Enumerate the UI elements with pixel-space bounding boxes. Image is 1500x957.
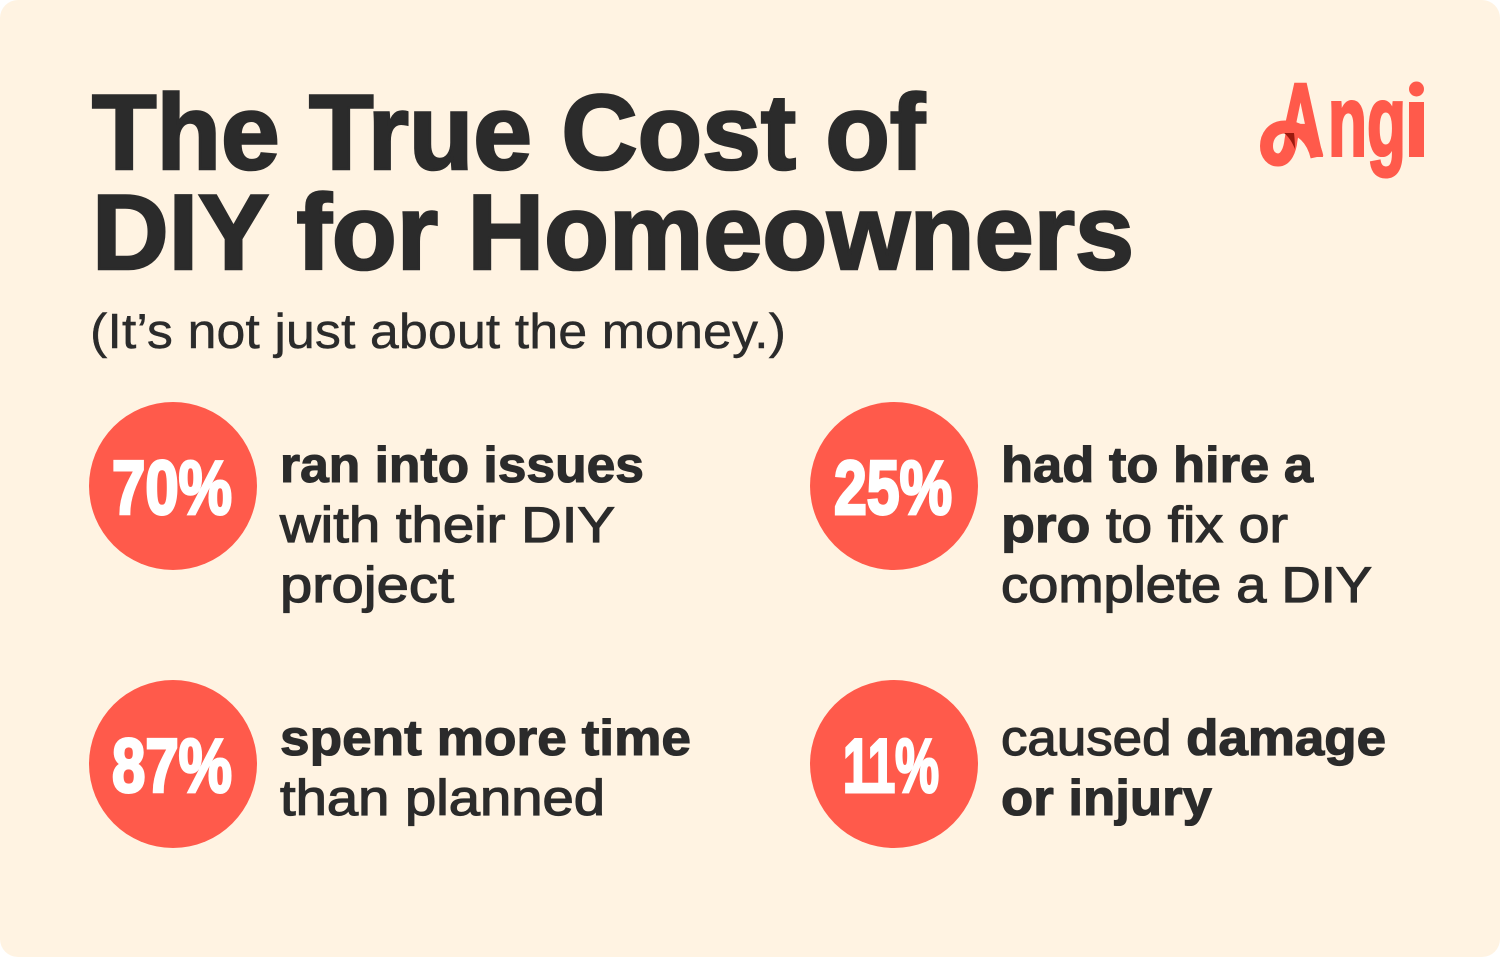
stat circle 11% — [810, 680, 978, 848]
stat circle 70% — [89, 402, 257, 570]
stat description 87%: than planned — [280, 770, 605, 826]
stat: 11% caused damage — [810, 680, 1386, 848]
stat description 25%: had to hire a — [1001, 437, 1314, 493]
stat description 87% — [280, 710, 691, 826]
stat: 25% had to hire a pro — [810, 402, 1372, 613]
stat value 11%: 11% — [843, 724, 939, 809]
stat description 11%: or injury — [1001, 770, 1212, 826]
stat description 25%: complete a DIY — [1001, 557, 1372, 613]
stat description 70%: project — [280, 557, 454, 613]
stat value 87%: 87% — [112, 724, 232, 809]
stat description 70%: with their DIY — [279, 497, 615, 553]
stat description 25% — [1001, 437, 1372, 613]
stat description 87%: spent more time — [280, 710, 691, 766]
stat: 70% ran into issues — [89, 402, 644, 613]
title: The True Cost of — [92, 72, 925, 192]
stat description 25%: pro to fix or — [1001, 497, 1288, 553]
stat value 70%: 70% — [112, 446, 232, 531]
title — [92, 72, 1134, 292]
stat description 11% — [1001, 710, 1386, 826]
subtitle: (It’s not just about the money.) — [90, 305, 786, 359]
stat value 25%: 25% — [834, 446, 952, 531]
logo: Angi — [1260, 82, 1424, 178]
stat description 11%: caused damage — [1001, 710, 1386, 766]
title: DIY for Homeowners — [92, 172, 1134, 292]
stat circle 25% — [810, 402, 978, 570]
stat description 70% — [279, 437, 644, 613]
stat description 70%: ran into issues — [280, 437, 644, 493]
stat: 87% spent more time — [89, 680, 691, 848]
stat circle 87% — [89, 680, 257, 848]
logo: Angi: A — [1278, 63, 1323, 177]
logo: Angi: ng — [1328, 66, 1406, 178]
